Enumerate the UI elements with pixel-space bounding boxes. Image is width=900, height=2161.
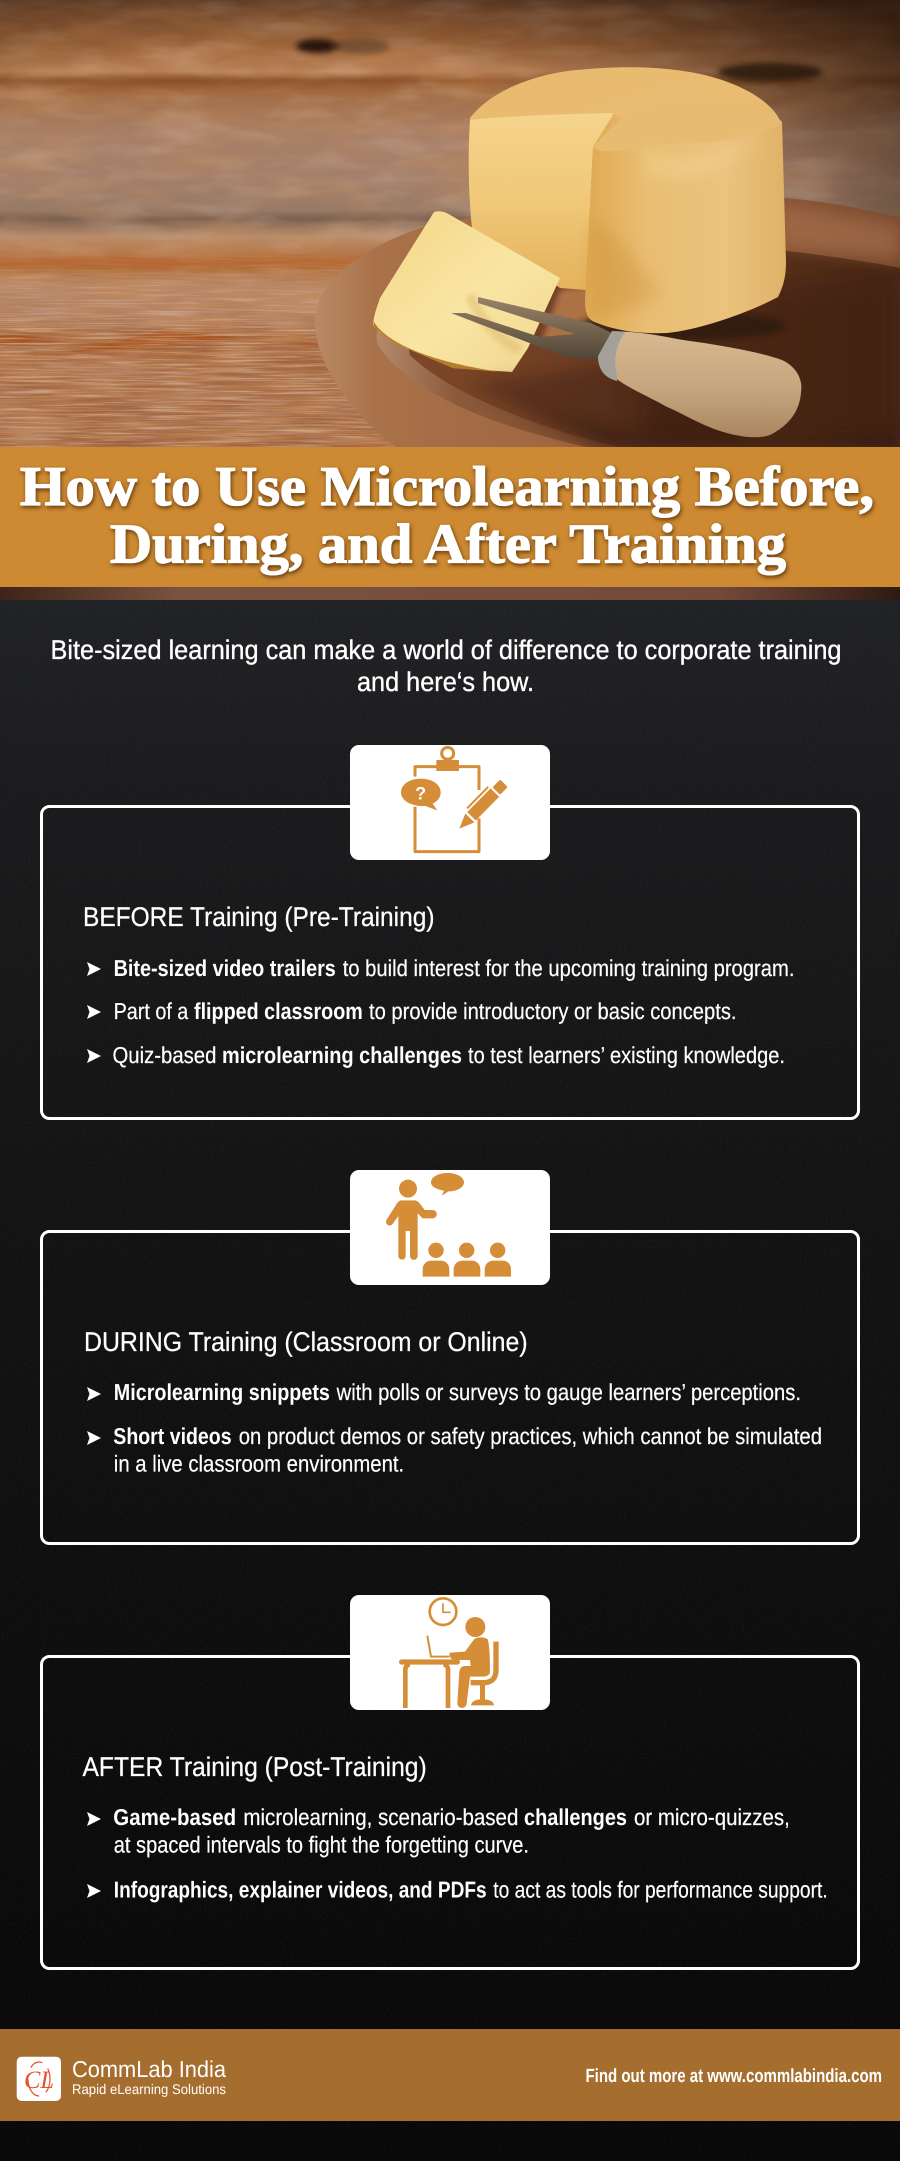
- bullet list: on product demos or safety practices, which cannot be simulated: [239, 1423, 822, 1449]
- bullet list: Quiz-based: [112, 1042, 216, 1068]
- bullet list: in a live classroom environment.: [114, 1450, 404, 1476]
- bullet list: Game-based: [113, 1804, 236, 1830]
- footer bar: [0, 2029, 900, 2121]
- title: During, and After Training: [110, 514, 786, 576]
- bullet list: challenges: [524, 1804, 627, 1830]
- bullet list: Microlearning snippets: [114, 1379, 330, 1405]
- title: How to Use Microlearning Before,: [20, 456, 874, 518]
- heading: AFTER Training (Post-Training): [82, 1752, 427, 1782]
- panel: before training: [42, 745, 858, 1118]
- bullet list: flipped classroom: [194, 998, 363, 1024]
- bullet list: Part of a: [114, 998, 188, 1024]
- bullet list: [87, 1379, 822, 1476]
- bullet list: with polls or surveys to gauge learners’ perceptions.: [336, 1379, 801, 1405]
- bullet list: [87, 1804, 828, 1902]
- intro text: and here‘s how.: [357, 667, 534, 697]
- bullet list: to build interest for the upcoming training program.: [343, 955, 794, 981]
- bullet list: to provide introductory or basic concepts.: [369, 998, 736, 1024]
- title banner: [0, 447, 900, 587]
- hero photo: cheese on a wooden board: [0, 0, 900, 447]
- bullet list: Bite-sized video trailers: [114, 955, 336, 981]
- brand name: Rapid eLearning Solutions: [72, 2081, 226, 2097]
- bullet list: to act as tools for performance support.: [493, 1876, 828, 1902]
- panel: after training: [42, 1595, 858, 1968]
- panel: during training: [42, 1170, 858, 1544]
- icon: clipboard with question and pen: [350, 745, 550, 860]
- icon: trainer speaking to learners: [350, 1170, 550, 1285]
- strip of wood below the banner: [0, 586, 900, 600]
- title: [20, 456, 874, 576]
- dark slate background: [0, 600, 900, 2161]
- bullet list: at spaced intervals to fight the forgetting curve.: [114, 1831, 529, 1857]
- intro text: [50, 635, 842, 697]
- logo mark: CL: [24, 2067, 54, 2094]
- icon: clipboard with question and pen: ?: [415, 783, 426, 803]
- bullet list: Infographics, explainer videos, and PDFs: [114, 1876, 487, 1902]
- bullet list: [87, 955, 794, 1068]
- cheese wheel: [469, 67, 786, 340]
- bullet list: microlearning, scenario-based: [243, 1804, 518, 1830]
- wooden board: [315, 195, 900, 447]
- bullet list: to test learners’ existing knowledge.: [468, 1042, 785, 1068]
- brand name: [72, 2056, 226, 2097]
- heading: BEFORE Training (Pre-Training): [83, 902, 434, 932]
- heading: DURING Training (Classroom or Online): [84, 1327, 528, 1357]
- icon: person at desk with clock: [350, 1595, 550, 1710]
- cheese knife: [451, 297, 801, 447]
- brand name: CommLab India: [72, 2056, 226, 2082]
- logo mark: [17, 2057, 61, 2101]
- intro text: Bite-sized learning can make a world of difference to corporate training: [50, 635, 842, 665]
- bullet list: or micro-quizzes,: [634, 1804, 790, 1830]
- bullet list: Short videos: [113, 1423, 232, 1449]
- bullet list: microlearning challenges: [222, 1042, 462, 1068]
- cheese slice: [373, 211, 560, 372]
